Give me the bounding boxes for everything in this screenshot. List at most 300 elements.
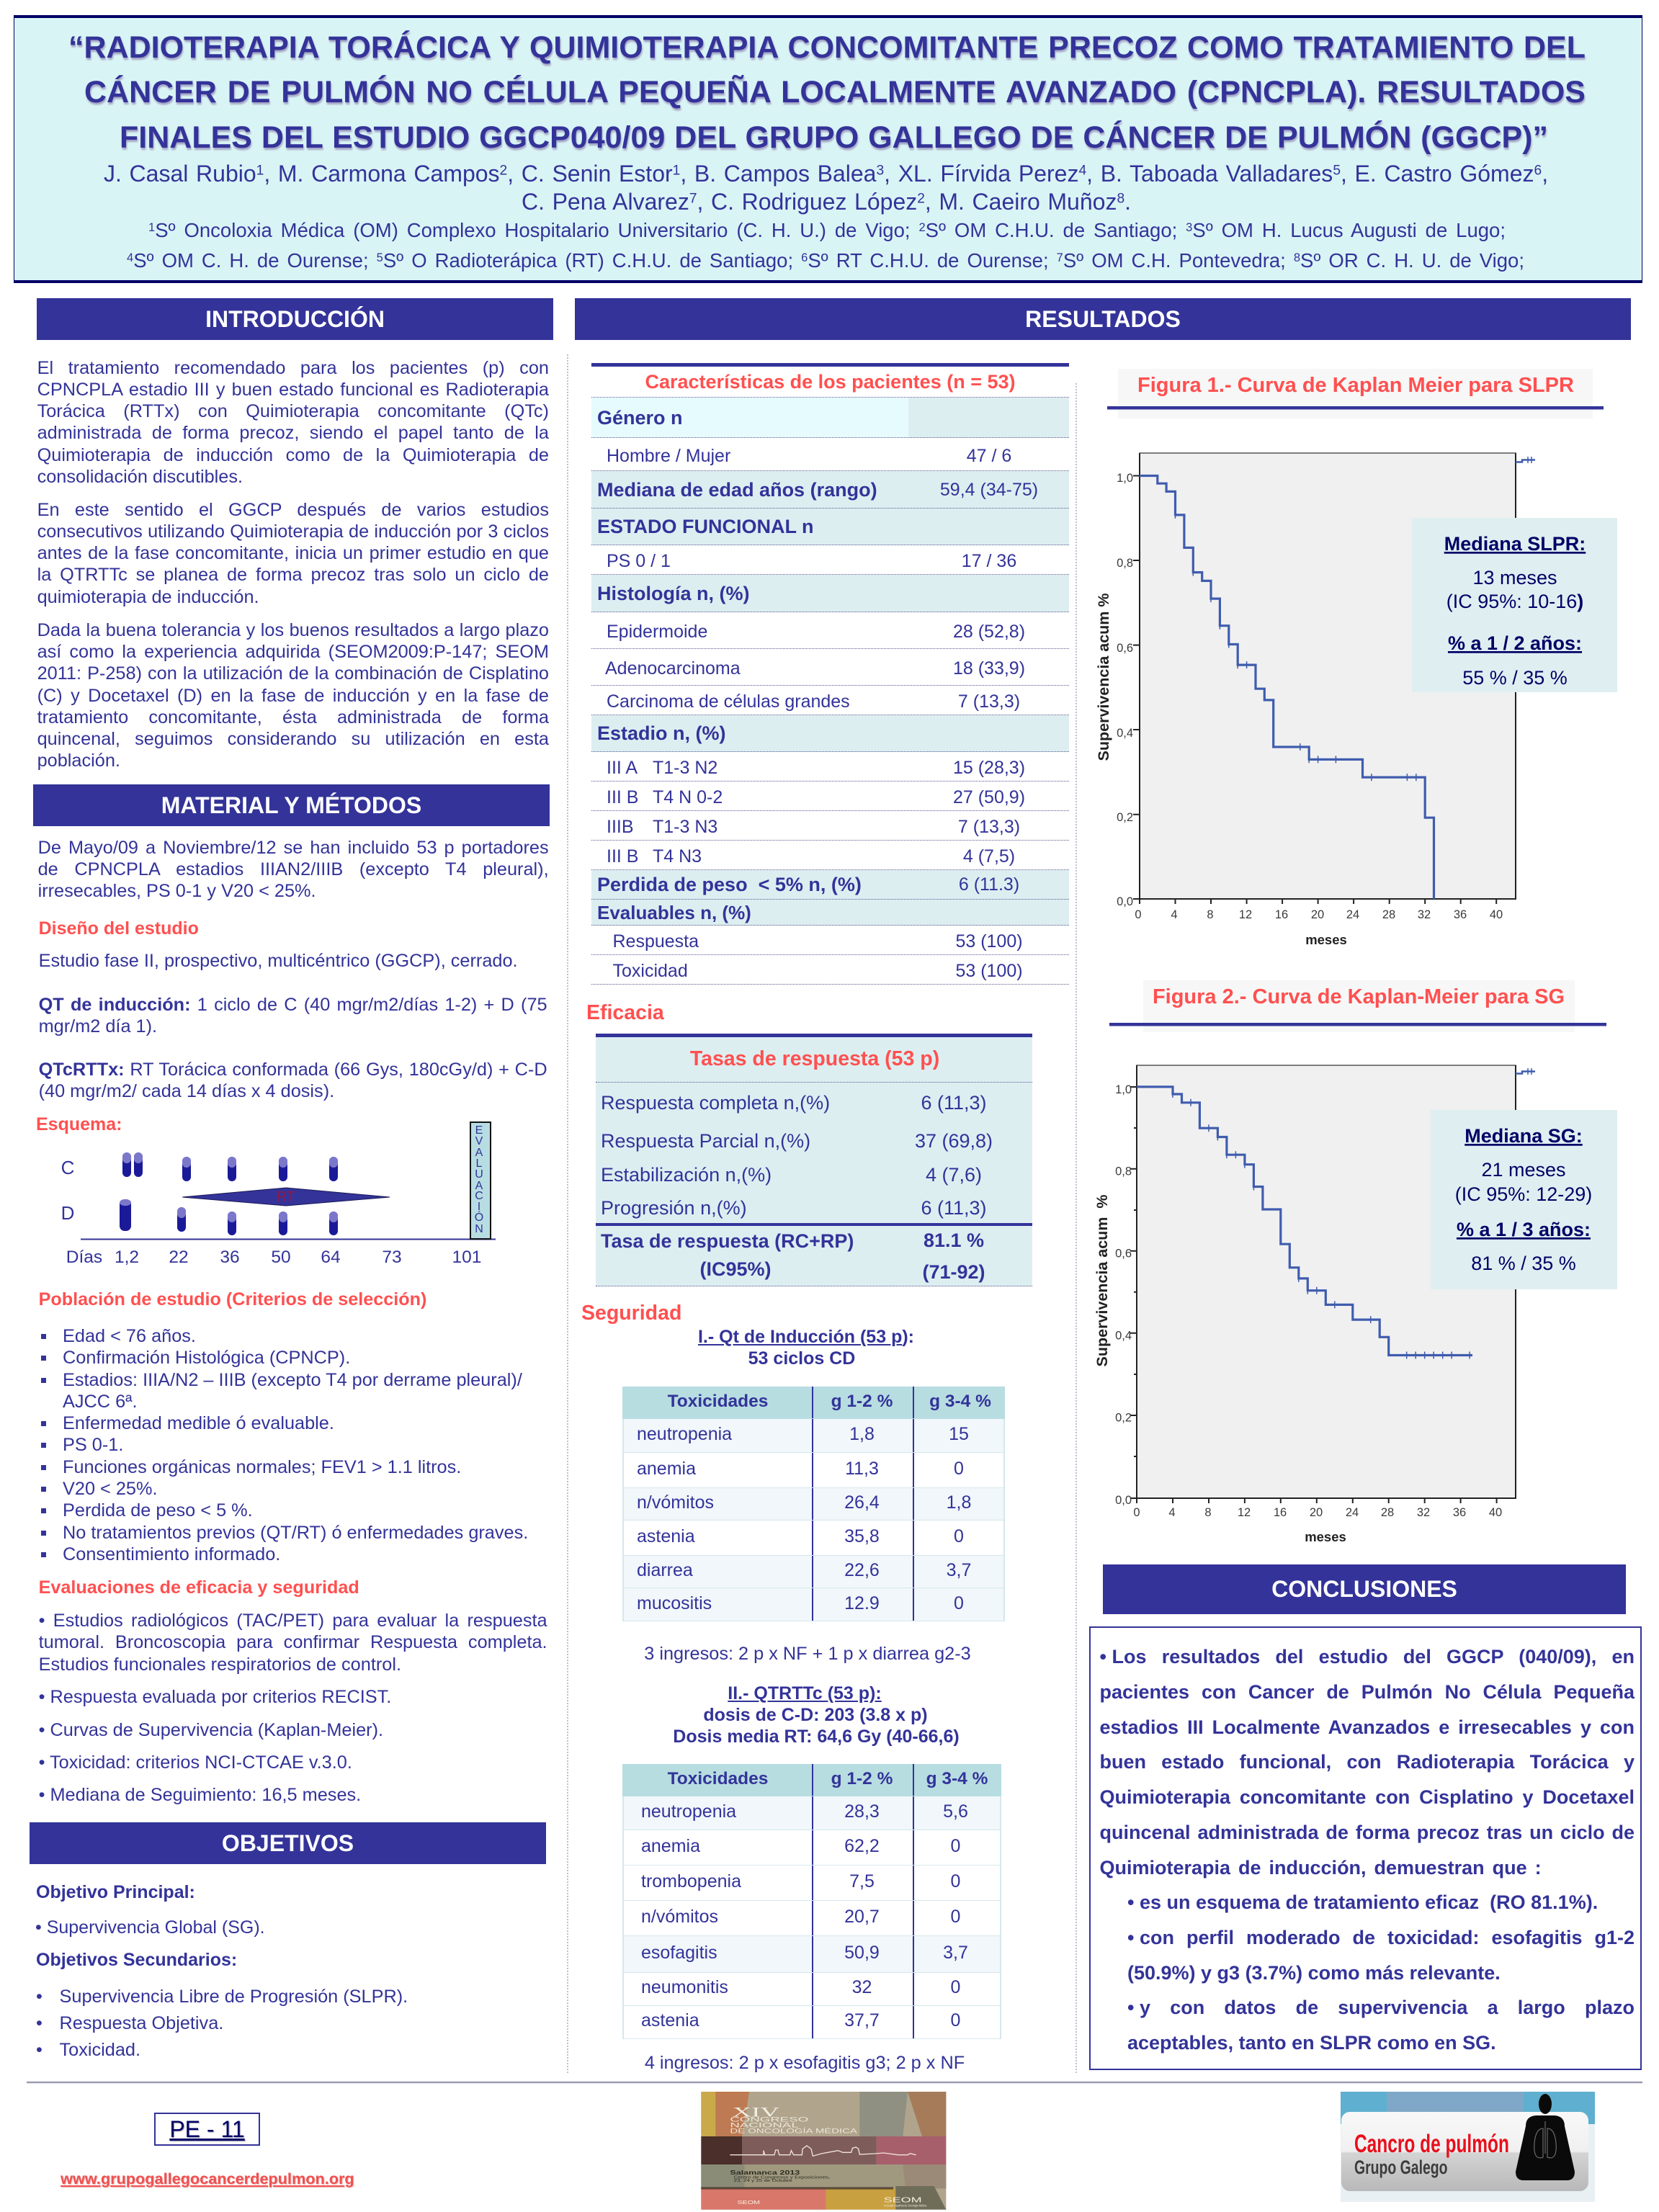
note: ingresos QTRTTc: 4 ingresos: 2 p x esofagitis g3; 2 p x NF xyxy=(645,2053,965,2073)
row: mucositis: 12.9 xyxy=(844,1593,880,1613)
text: introducción: (C) y Docetaxel (D) en la fase de inducción y en la fase de xyxy=(37,686,549,706)
list: criterios de selección: Enfermedad medible ó evaluable. xyxy=(63,1413,334,1433)
text: QTcRTTx: (40 mgr/m2/ cada 14 días x 4 dosis). xyxy=(39,1081,334,1101)
image: congress poster xyxy=(701,2092,947,2210)
row: IIIB T1-3 N3: IIIB xyxy=(607,817,634,837)
row: respuesta: Respuesta xyxy=(612,931,699,951)
row: PS xyxy=(591,545,1069,575)
text: conclusiones: quincenal administrada de forma precoz tras un ciclo de xyxy=(1099,1822,1635,1843)
row: mediana de edad: Mediana de edad años (rango) xyxy=(597,479,877,501)
header row: Toxicidades xyxy=(668,1392,768,1410)
text: conclusiones: y con datos de supervivencia a largo plazo xyxy=(1140,1997,1635,2018)
header row xyxy=(622,1387,1005,1419)
x-axis ticks: 8 xyxy=(1207,908,1214,921)
row: progresión xyxy=(601,1197,987,1219)
text: introducción: población. xyxy=(37,751,120,771)
text: conclusiones: pacientes con Cancer de Pulmón No Célula Pequeña xyxy=(1099,1681,1635,1703)
row: III A xyxy=(591,752,1069,782)
text: introducción: Quimioterapia de inducción como de la Quimioterapia de xyxy=(37,445,549,465)
subheading: QTRTTc: Dosis media RT: 64,6 Gy (40-66,6) xyxy=(673,1727,960,1747)
row: toxicidad: 53 (100) xyxy=(955,961,1023,981)
x-axis ticks: 12 xyxy=(1239,908,1252,921)
header row xyxy=(622,1764,1001,1796)
box: evaluación: E xyxy=(475,1124,483,1137)
list: criterios de selección: Perdida de peso < 5 %. xyxy=(63,1500,253,1521)
row: diarrea: 3,7 xyxy=(947,1560,971,1580)
axes xyxy=(1133,453,1516,904)
row: hombre / mujer: Hombre / Mujer xyxy=(607,446,730,466)
text: material y métodos: de CPNCPLA estadios IIIAN2/IIIB (excepto T4 pleural), xyxy=(38,859,549,879)
y-axis ticks: 1,0 xyxy=(1117,472,1133,485)
image: congress poster: SEOM xyxy=(737,2200,760,2206)
row: n/vómitos: 1,8 xyxy=(947,1492,971,1513)
row: neutropenia: 1,8 xyxy=(849,1424,875,1444)
text: introducción: administrada de forma precoz, siendo el papel tanto de la xyxy=(37,423,549,443)
x-axis ticks: 36 xyxy=(1453,1506,1466,1519)
x-axis ticks: 0 xyxy=(1133,1506,1140,1519)
plot area xyxy=(1137,1065,1516,1498)
list: criterios de selección: Estadios: IIIA/N2 – IIIB (excepto T4 por derrame pleural)/ xyxy=(63,1370,522,1390)
text: QT de inducción xyxy=(39,995,547,1036)
survival curve SLPR xyxy=(1140,457,1535,899)
y-axis ticks: 0,2 xyxy=(1117,811,1133,824)
y-axis title: Supervivencia acum % xyxy=(1094,1194,1111,1367)
row: mediana de edad xyxy=(591,471,1069,509)
row: esofagitis: esofagitis xyxy=(641,1942,717,1962)
image: congress poster: CONGRESO xyxy=(730,2116,808,2123)
survival curve SG xyxy=(1137,1068,1535,1358)
row: trombopenia xyxy=(622,1866,1001,1900)
row: toxicidad xyxy=(591,955,1069,985)
list: criterios de selección: Edad < 76 años. xyxy=(63,1326,196,1346)
box: evaluación: V xyxy=(475,1135,483,1147)
x-axis ticks: 20 xyxy=(1310,1506,1323,1519)
row: estadio xyxy=(591,715,1069,752)
y-axis ticks xyxy=(1115,1083,1132,1507)
row: género xyxy=(591,398,1069,438)
list: objetivos secundarios: Toxicidad. xyxy=(59,2040,140,2060)
row: n/vómitos xyxy=(622,1488,1005,1521)
row: III B T4 N3: 4 (7,5) xyxy=(963,846,1015,867)
header row: Toxicidades xyxy=(668,1769,768,1788)
row: astenia xyxy=(622,2005,1001,2038)
row: III B T4 N0-2 xyxy=(591,782,1069,811)
row: hombre / mujer xyxy=(591,438,1069,471)
row: trombopenia: 7,5 xyxy=(849,1871,875,1891)
row: n/vómitos: 20,7 xyxy=(844,1906,880,1926)
list: objetivos secundarios: • xyxy=(36,2040,43,2060)
row: epidermoide: Epidermoide xyxy=(607,622,707,642)
list: objetivos secundarios: • xyxy=(36,1987,43,2007)
y-axis ticks: 0,4 xyxy=(1117,727,1133,740)
row: diarrea: 22,6 xyxy=(844,1560,880,1580)
figure 1 title xyxy=(1107,369,1604,418)
info box: mediana SLPR: (IC 95%: 10-16) xyxy=(1446,591,1583,612)
info box: mediana SLPR: % a 1 / 2 años: xyxy=(1448,632,1582,654)
row: respuesta completa xyxy=(601,1092,987,1114)
x-axis ticks: 16 xyxy=(1275,908,1288,921)
row: PS: 17 / 36 xyxy=(962,551,1016,571)
diamond: radioterapia: RT xyxy=(277,1189,295,1205)
row: respuesta parcial: Respuesta Parcial n,(%) xyxy=(601,1130,810,1152)
y-axis ticks: 0,2 xyxy=(1115,1412,1132,1425)
objetivo principal: Objetivo Principal: xyxy=(36,1882,195,1902)
row: estabilización: Estabilización n,(%) xyxy=(601,1164,772,1186)
row: esofagitis: 3,7 xyxy=(943,1942,968,1962)
logo text: grupo galego: Grupo Galego xyxy=(1354,2157,1448,2178)
row: astenia: 35,8 xyxy=(844,1526,880,1546)
row: epidermoide xyxy=(591,612,1069,649)
list: evaluaciones: Estudios funcionales respiratorios de control. xyxy=(39,1654,401,1675)
timeline labels: 50 xyxy=(271,1248,291,1267)
row: neutropenia xyxy=(622,1796,1001,1830)
row: IIIB T1-3 N3: T1-3 N3 xyxy=(653,817,717,837)
list: evaluaciones: • Curvas de Supervivencia (Kaplan-Meier). xyxy=(39,1720,383,1740)
text: conclusiones: buen estado funcional, con Radioterapia Torácica y xyxy=(1099,1751,1635,1773)
poster code badge: PE - 11 xyxy=(169,2116,245,2142)
row: histología: Histología n, (%) xyxy=(597,583,749,604)
text: introducción: El tratamiento recomendado para los pacientes (p) con xyxy=(37,357,549,377)
x-axis ticks: 16 xyxy=(1274,1506,1287,1519)
x-axis title: meses xyxy=(1305,932,1347,947)
heading: objetivos xyxy=(30,1822,546,1864)
title xyxy=(68,30,1586,157)
header panel xyxy=(14,15,1642,283)
row: progresión: Progresión n,(%) xyxy=(601,1197,747,1219)
info box: mediana SLPR: 55 % / 35 % xyxy=(1462,667,1568,689)
row: tasa de respuesta: (IC95%) xyxy=(699,1258,772,1280)
row: diarrea xyxy=(622,1556,1005,1588)
list: evaluaciones xyxy=(39,1611,547,1805)
subheading: QTRTTc: II.- QTRTTc (53 p): xyxy=(728,1683,882,1703)
heading: resultados xyxy=(575,298,1631,340)
heading: esquema: Esquema: xyxy=(36,1114,122,1134)
x-axis ticks: 32 xyxy=(1417,1506,1430,1519)
x-axis ticks: 12 xyxy=(1238,1506,1251,1519)
figure 1 title: Figura 1.- Curva de Kaplan Meier para SLPR xyxy=(1137,374,1574,397)
row: respuesta completa: Respuesta completa n,(%) xyxy=(601,1092,830,1114)
row: III B T4 N3: III B xyxy=(607,846,638,867)
row: pérdida de peso xyxy=(591,870,1069,900)
heading: introducción xyxy=(37,298,553,340)
header row: g 1-2 % xyxy=(831,1769,893,1788)
row: astenia: 37,7 xyxy=(844,2010,880,2030)
row: estabilización: 4 (7,6) xyxy=(926,1164,982,1186)
title: FINALES DEL ESTUDIO GGCP040/09 DEL GRUPO GALLEGO DE CÁNCER DE PULMÓN (GGCP)” xyxy=(120,120,1548,155)
text: conclusiones: Quimioterapia de inducción, demuestran que : xyxy=(1099,1857,1542,1879)
image: congress poster: DE ONCOLOGÍA MÉDICA xyxy=(730,2127,858,2135)
table: toxicidades QTRTTc xyxy=(622,1764,1001,2039)
row: progresión: 6 (11,3) xyxy=(921,1197,987,1219)
row: mediana de edad: 59,4 (34-75) xyxy=(940,480,1038,500)
heading: eficacia: Eficacia xyxy=(586,1001,664,1024)
text: conclusiones: estadios III Localmente Avanzados e irresecables y con xyxy=(1099,1716,1635,1738)
figure 2 title xyxy=(1109,980,1606,1032)
row: esofagitis xyxy=(622,1936,1001,1972)
timeline axis xyxy=(81,1239,496,1240)
row: anemia: 11,3 xyxy=(845,1459,879,1479)
table title: Características de los pacientes (n = 53) xyxy=(645,371,1016,393)
subheading: QT de inducción: I.- Qt de Inducción (53 p): xyxy=(698,1327,914,1347)
info box: mediana SLPR: Mediana SLPR: xyxy=(1444,533,1586,555)
diamond: radioterapia xyxy=(182,1188,390,1206)
row: estado funcional xyxy=(591,509,1069,545)
list: evaluaciones: • Mediana de Seguimiento: 16,5 meses. xyxy=(39,1785,361,1805)
text: introducción: 2011: P-258) con la utilización de la combinación de Cisplatino xyxy=(37,663,549,684)
text: conclusiones: Quimioterapia concomitante con Cisplatino y Docetaxel xyxy=(1099,1786,1635,1808)
heading: población de estudio: Población de estudio (Criterios de selección) xyxy=(39,1289,426,1309)
authors: J. Casal Rubio1, M. Carmona Campos2, C. Senin Estor1, B. Campos Balea3, XL. Fírvida Perez4, B. Taboada Valladares5, E. Castro Gómez6, xyxy=(104,161,1548,187)
image: congress poster: Salamanca 2013 xyxy=(730,2170,800,2176)
row: mucositis: 0 xyxy=(954,1593,964,1613)
text: conclusiones: con perfil moderado de toxicidad: esofagitis g1-2 xyxy=(1140,1927,1635,1948)
text: introducción: Torácica (RTTx) con Quimioterapia concomitante (QTc) xyxy=(37,401,549,421)
title: CÁNCER DE PULMÓN NO CÉLULA PEQUEÑA LOCALMENTE AVANZADO (CPNCPLA). RESULTADOS xyxy=(84,75,1586,109)
authors: C. Pena Alvarez7, C. Rodriguez López2, M. Caeiro Muñoz8. xyxy=(522,189,1131,215)
text: conclusiones: • xyxy=(1127,1997,1134,2018)
image: congress poster: NACIONAL xyxy=(730,2122,799,2129)
panel: figura 1 Kaplan-Meier SLPR xyxy=(1095,374,1617,947)
box: evaluación: U xyxy=(475,1168,483,1181)
row: evaluables: Evaluables n, (%) xyxy=(597,902,751,923)
list: evaluaciones: • Estudios radiológicos (TAC/PET) para evaluar la respuesta xyxy=(39,1611,547,1631)
label: D: D xyxy=(61,1202,74,1224)
row: tasa de respuesta: (71-92) xyxy=(922,1261,985,1283)
timeline labels: 36 xyxy=(220,1248,240,1267)
note: ingresos inducción: 3 ingresos: 2 p x NF + 1 p x diarrea g2-3 xyxy=(644,1644,971,1664)
text: introducción: consolidación discutibles. xyxy=(37,467,243,487)
info box: mediana SG: % a 1 / 3 años: xyxy=(1457,1219,1591,1240)
row: evaluables xyxy=(591,900,1069,926)
info box: mediana SLPR: 13 meses xyxy=(1472,567,1557,588)
row: anemia: anemia xyxy=(641,1835,700,1855)
row: adenocarcinoma xyxy=(591,649,1069,686)
row: astenia: astenia xyxy=(641,2010,699,2030)
timeline labels: 22 xyxy=(169,1248,189,1267)
row: neumonitis: neumonitis xyxy=(641,1977,728,1997)
row: n/vómitos: 0 xyxy=(951,1906,960,1926)
x-axis ticks: 40 xyxy=(1489,1506,1502,1519)
row: n/vómitos: n/vómitos xyxy=(641,1906,718,1926)
box: evaluación: L xyxy=(476,1158,483,1170)
row: género: Género n xyxy=(597,407,683,429)
timeline labels: Días xyxy=(66,1248,102,1267)
x-axis ticks: 4 xyxy=(1171,908,1178,921)
row: tasa de respuesta xyxy=(601,1230,985,1283)
text: introducción: la QTRTTc se planea de forma precoz tras solo un ciclo de xyxy=(37,565,549,585)
text: introducción: CPNCPLA estadio III y buen estado funcional es Radioterapia xyxy=(37,380,549,400)
x-axis title: meses xyxy=(1305,1529,1346,1544)
box: evaluación: A xyxy=(475,1180,483,1192)
text: conclusiones: • xyxy=(1099,1646,1106,1667)
text: QT de inducción: mgr/m2 día 1). xyxy=(39,1016,157,1036)
row: astenia: astenia xyxy=(637,1526,695,1546)
chart: esquema de tratamiento xyxy=(61,1121,496,1267)
row: mucositis: mucositis xyxy=(637,1593,712,1613)
list: objetivos secundarios: Respuesta Objetiva. xyxy=(59,2013,223,2033)
info box: mediana SG: 81 % / 35 % xyxy=(1471,1253,1576,1274)
table: tasas de respuesta xyxy=(596,1034,1032,1286)
text: conclusiones: Los resultados del estudio del GGCP (040/09), en xyxy=(1112,1646,1635,1667)
info box: mediana SG: 21 meses xyxy=(1481,1159,1566,1181)
table: toxicidades inducción xyxy=(622,1387,1005,1621)
y-axis ticks: 0,8 xyxy=(1117,557,1133,570)
affiliations: 1Sº Oncoloxia Médica (OM) Complexo Hospitalario Universitario (C. H. U.) de Vigo; 2Sº OM C.H.U. de Santiago; 3Sº OM H. Lucus Augusti de Lugo; xyxy=(148,219,1506,241)
text: introducción: Dada la buena tolerancia y los buenos resultados a largo plazo xyxy=(37,620,549,640)
text: QTcRTTx xyxy=(39,1060,547,1101)
row: neutropenia: 5,6 xyxy=(943,1801,968,1822)
heading: diseño del estudio: Diseño del estudio xyxy=(39,918,199,939)
info box: mediana SG: (IC 95%: 12-29) xyxy=(1455,1183,1592,1205)
row: respuesta: 53 (100) xyxy=(955,931,1023,951)
text: material y métodos: irresecables, PS 0-1 y V20 < 25%. xyxy=(38,881,316,901)
info box: mediana SG xyxy=(1431,1110,1617,1289)
row: anemia xyxy=(622,1453,1005,1488)
row: neutropenia: neutropenia xyxy=(637,1424,732,1444)
row: astenia: 0 xyxy=(951,2010,960,2030)
subheading: QTRTTc xyxy=(673,1683,960,1747)
x-axis ticks: 8 xyxy=(1204,1506,1212,1519)
row: III B T4 N0-2: T4 N 0-2 xyxy=(653,787,723,807)
y-axis ticks: 0,0 xyxy=(1115,1494,1132,1507)
list: criterios de selección xyxy=(41,1326,528,1564)
heading: objetivos: OBJETIVOS xyxy=(222,1830,354,1855)
list: objetivos secundarios xyxy=(36,1987,408,2060)
box: evaluación: A xyxy=(475,1147,483,1159)
row: estadio: Estadio n, (%) xyxy=(597,722,726,744)
row: trombopenia: trombopenia xyxy=(641,1871,741,1891)
timeline labels xyxy=(66,1248,481,1267)
x-axis ticks: 28 xyxy=(1382,908,1395,921)
list: criterios de selección: PS 0-1. xyxy=(63,1435,123,1455)
header row: g 3-4 % xyxy=(926,1769,988,1788)
row: anemia: 0 xyxy=(951,1835,960,1855)
image: congress poster: Sociedad Española de Oncología Médica xyxy=(884,2204,927,2207)
row: III B T4 N0-2: 27 (50,9) xyxy=(953,787,1025,807)
table title xyxy=(591,367,1069,398)
box: evaluación: N xyxy=(475,1223,483,1235)
text: supervivencia global: • Supervivencia Global (SG). xyxy=(35,1917,265,1938)
row: neutropenia xyxy=(622,1419,1005,1453)
text: introducción: tratamiento concomitante, ésta administrada de forma xyxy=(37,707,549,727)
x-axis ticks xyxy=(1133,1506,1502,1519)
row: esofagitis: 50,9 xyxy=(844,1942,880,1962)
row: respuesta xyxy=(591,926,1069,955)
text: material y métodos xyxy=(38,838,549,901)
x-axis ticks: 24 xyxy=(1346,1506,1359,1519)
row: células grandes: Carcinoma de células grandes xyxy=(607,691,850,712)
row: células grandes xyxy=(591,686,1069,715)
y-axis ticks xyxy=(1117,472,1133,908)
poster code badge xyxy=(154,2113,260,2146)
row: anemia: 0 xyxy=(954,1459,964,1479)
row: histología xyxy=(591,575,1069,612)
affiliations: 4Sº OM C. H. de Ourense; 5Sº O Radioterápica (RT) C.H.U. de Santiago; 6Sº RT C.H.U. de Ourense; 7Sº OM C.H. Pontevedra; 8Sº OR C. H. U. de Vigo; xyxy=(127,249,1524,272)
y-axis ticks: 0,6 xyxy=(1117,642,1133,655)
list: criterios de selección: Funciones orgánicas normales; FEV1 > 1.1 litros. xyxy=(63,1457,461,1477)
timeline labels: 73 xyxy=(382,1248,402,1267)
text: QT de inducción: QT de inducción: 1 ciclo de C (40 mgr/m2/días 1-2) + D (75 xyxy=(39,995,547,1015)
subheading: QT de inducción xyxy=(698,1327,914,1369)
y-axis ticks: 0,4 xyxy=(1115,1330,1132,1343)
row: adenocarcinoma: Adenocarcinoma xyxy=(605,658,741,679)
info box: mediana SG: Mediana SG: xyxy=(1465,1125,1583,1147)
info box: mediana SLPR xyxy=(1412,518,1617,692)
heading: material y métodos xyxy=(33,784,550,826)
row: neumonitis: 0 xyxy=(951,1977,960,1997)
row: neutropenia: 15 xyxy=(949,1424,969,1444)
label: C: C xyxy=(61,1157,74,1178)
heading: resultados: RESULTADOS xyxy=(1025,305,1181,331)
image: congress poster: Centro de Congresos y Exposiciones, xyxy=(734,2176,830,2180)
timeline labels: 1,2 xyxy=(115,1248,139,1267)
row: n/vómitos: 26,4 xyxy=(844,1492,880,1513)
header row: g 3-4 % xyxy=(929,1392,991,1410)
row: mucositis xyxy=(622,1588,1005,1621)
objetivos secundarios: Objetivos Secundarios: xyxy=(36,1950,237,1970)
list: criterios de selección: Confirmación Histológica (CPNCP). xyxy=(63,1348,350,1368)
heading: evaluaciones: Evaluaciones de eficacia y seguridad xyxy=(39,1577,359,1598)
row: III B T4 N3 xyxy=(591,841,1069,870)
y-axis title: Supervivencia acum % xyxy=(1095,593,1112,761)
person silhouette xyxy=(1516,2094,1575,2180)
list: criterios de selección: No tratamientos previos (QT/RT) ó enfermedades graves. xyxy=(63,1523,528,1543)
x-axis ticks xyxy=(1135,908,1503,921)
row: IIIB T1-3 N3: 7 (13,3) xyxy=(958,817,1020,837)
text: introducción: así como la experiencia adquirida (SEOM2009:P-147; SEOM xyxy=(37,642,549,662)
pills: cisplatino xyxy=(122,1152,338,1181)
heading: introducción: INTRODUCCIÓN xyxy=(205,305,385,331)
row: hombre / mujer: 47 / 6 xyxy=(967,446,1011,466)
row: respuesta parcial xyxy=(601,1130,993,1152)
plot area xyxy=(1140,453,1516,899)
x-axis ticks: 20 xyxy=(1311,908,1324,921)
image: congress poster: XIV xyxy=(733,2105,779,2120)
text: introducción: antes de la fase concomitante, inicia un primer estudio en que xyxy=(37,543,549,563)
website link: www.grupogallegocancerdepulmon.org xyxy=(61,2170,354,2188)
row: trombopenia: 0 xyxy=(951,1871,960,1891)
text: QTcRTTx: QTcRTTx: RT Torácica conformada (66 Gys, 180cGy/d) + C-D xyxy=(39,1060,547,1080)
row: neumonitis: 32 xyxy=(852,1977,872,1997)
image: congress poster: 23, 24 y 25 de Octubre xyxy=(734,2179,792,2182)
list: evaluaciones: • Respuesta evaluada por criterios RECIST. xyxy=(39,1687,391,1707)
x-axis ticks: 28 xyxy=(1381,1506,1394,1519)
row: III B T4 N0-2: III B xyxy=(607,787,638,807)
axes xyxy=(1130,1065,1516,1503)
authors xyxy=(104,161,1548,215)
panel: conclusiones xyxy=(1089,1626,1642,2070)
row: epidermoide: 28 (52,8) xyxy=(953,622,1025,642)
row: IIIB T1-3 N3 xyxy=(591,811,1069,841)
y-axis ticks: 1,0 xyxy=(1115,1083,1132,1096)
y-axis ticks: 0,6 xyxy=(1115,1248,1132,1261)
row: neumonitis xyxy=(622,1972,1001,2005)
image: congress poster: SEOM xyxy=(884,2196,922,2204)
row: diarrea: diarrea xyxy=(637,1560,693,1580)
box: evaluación: Ó xyxy=(475,1210,483,1224)
row: n/vómitos xyxy=(622,1900,1001,1936)
x-axis ticks: 4 xyxy=(1168,1506,1176,1519)
row: estado funcional: ESTADO FUNCIONAL n xyxy=(597,516,814,537)
heading: seguridad: Seguridad xyxy=(581,1302,681,1325)
row: estabilización xyxy=(601,1164,982,1186)
x-axis ticks: 36 xyxy=(1454,908,1467,921)
x-axis ticks: 32 xyxy=(1418,908,1431,921)
header row: g 1-2 % xyxy=(831,1392,893,1410)
row: neutropenia: neutropenia xyxy=(641,1801,736,1822)
subheading: QTRTTc: dosis de C-D: 203 (3.8 x p) xyxy=(703,1705,928,1725)
row: células grandes: 7 (13,3) xyxy=(958,691,1020,712)
